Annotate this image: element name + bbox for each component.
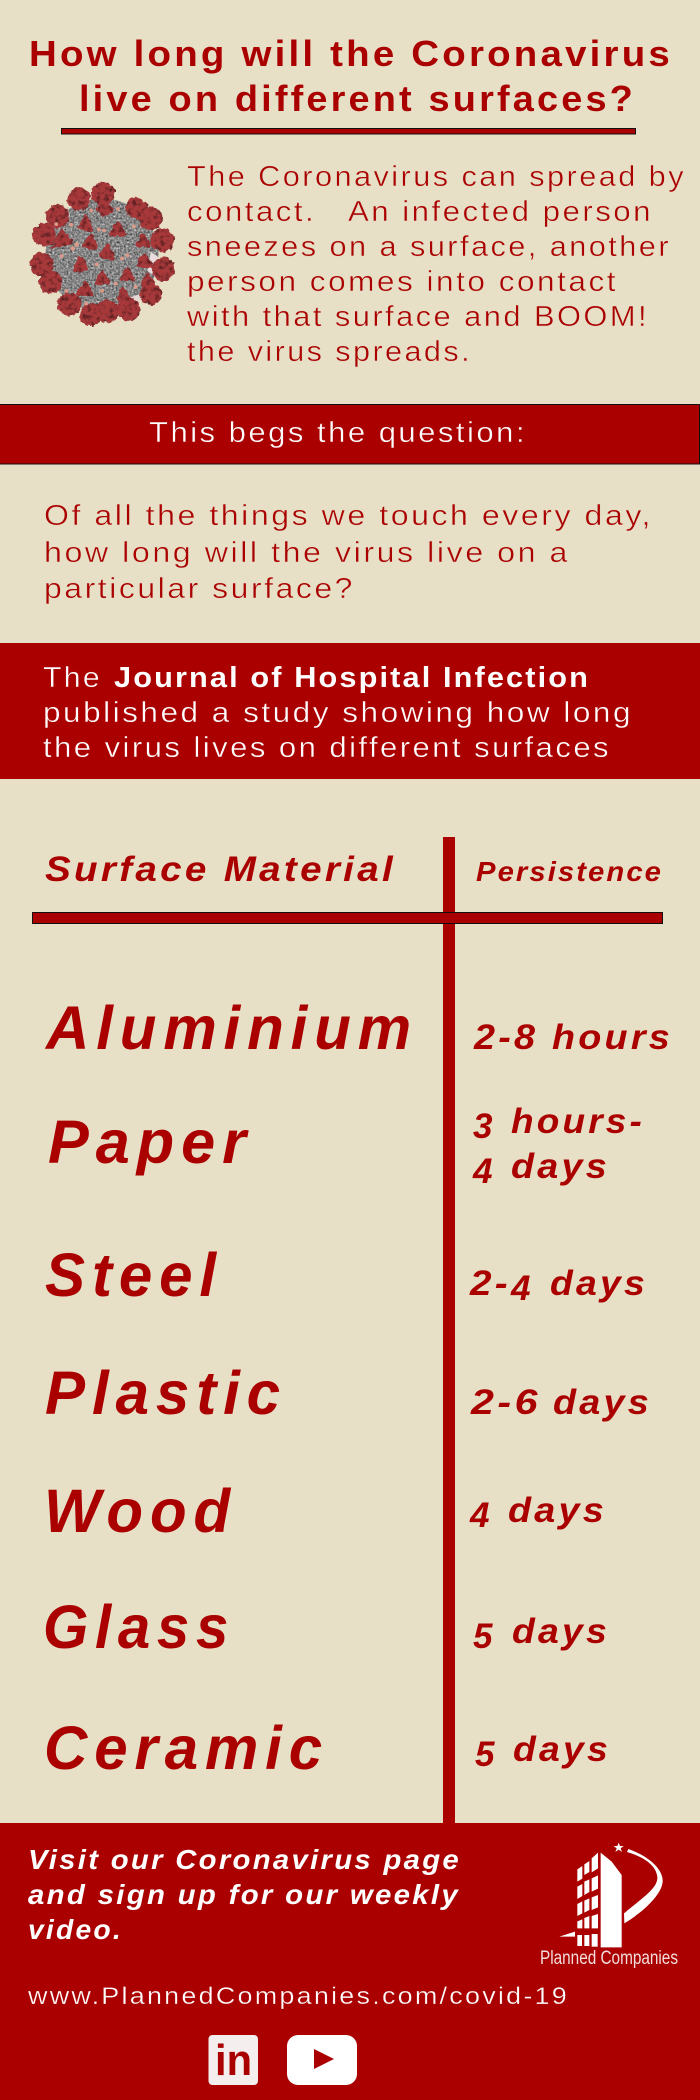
- banner: this begs the question: This begs the question:: [149, 417, 527, 449]
- question paragraph: [44, 500, 653, 605]
- icon: coronavirus particle: [32, 184, 173, 323]
- panel: journal study banner: Journal of Hospital Infection: [114, 662, 590, 694]
- website url: www.PlannedCompanies.com/covid-19: [27, 1983, 569, 2010]
- panel: journal study banner: [0, 643, 700, 779]
- row: wood: 4: [469, 1496, 492, 1535]
- call to action: Visit our Coronavirus page: [28, 1844, 461, 1875]
- row: wood: days: [508, 1491, 607, 1530]
- row: paper: 4: [472, 1152, 495, 1191]
- row: paper: 3: [473, 1107, 495, 1146]
- row: aluminium: [44, 994, 673, 1062]
- logo: planned companies: [540, 1843, 678, 1969]
- column heading: persistence: Persistence: [476, 856, 663, 887]
- row: plastic: days: [553, 1383, 652, 1422]
- intro paragraph: with that surface and BOOM!: [186, 301, 649, 333]
- title: live on different surfaces?: [79, 78, 636, 119]
- row: plastic: [45, 1359, 652, 1427]
- row: steel: 2-: [469, 1264, 511, 1303]
- title: How long will the Coronavirus: [29, 33, 673, 74]
- intro paragraph: The Coronavirus can spread by: [187, 161, 686, 193]
- icon: youtube: [287, 2035, 357, 2085]
- intro paragraph: contact. An infected person: [187, 196, 653, 228]
- row: steel: 4: [510, 1269, 533, 1308]
- intro paragraph: the virus spreads.: [187, 336, 472, 368]
- table column divider: [443, 837, 455, 1827]
- row: ceramic: Ceramic: [44, 1714, 329, 1782]
- panel: footer: [0, 1823, 700, 2100]
- call to action: [28, 1844, 461, 1945]
- row: paper: [48, 1102, 645, 1191]
- row: paper: Paper: [48, 1108, 253, 1176]
- icon: linkedin: in: [215, 2036, 252, 2085]
- intro paragraph: sneezes on a surface, another: [187, 231, 671, 263]
- panel: journal study banner: the virus lives on different surfaces: [43, 732, 611, 764]
- row: plastic: 2-6: [470, 1383, 541, 1422]
- row: steel: [45, 1241, 648, 1309]
- row: steel: days: [550, 1264, 648, 1303]
- banner: this begs the question: [0, 404, 700, 464]
- intro paragraph: [186, 161, 686, 368]
- row: glass: 5: [473, 1617, 495, 1656]
- question paragraph: Of all the things we touch every day,: [44, 500, 653, 532]
- question paragraph: how long will the virus live on a: [44, 537, 570, 569]
- call to action: video.: [28, 1914, 123, 1945]
- intro paragraph: person comes into contact: [187, 266, 618, 298]
- row: paper: hours-: [511, 1102, 645, 1141]
- question paragraph: particular surface?: [44, 573, 355, 605]
- row: glass: [43, 1593, 610, 1661]
- title: [29, 33, 673, 119]
- row: wood: Wood: [44, 1477, 237, 1545]
- row: plastic: Plastic: [45, 1359, 287, 1427]
- row: glass: days: [512, 1612, 610, 1651]
- row: ceramic: [44, 1714, 611, 1782]
- row: glass: Glass: [43, 1593, 235, 1661]
- row: wood: [44, 1477, 607, 1545]
- row: aluminium: Aluminium: [44, 994, 418, 1062]
- panel: journal study banner: published a study showing how long: [43, 697, 633, 729]
- title underline: [62, 128, 636, 134]
- row: steel: Steel: [45, 1241, 223, 1309]
- row: ceramic: 5: [475, 1735, 497, 1774]
- call to action: and sign up for our weekly: [28, 1879, 460, 1910]
- column heading: surface material: Surface Material: [45, 850, 396, 889]
- row: ceramic: days: [513, 1730, 611, 1769]
- row: paper: days: [511, 1147, 610, 1186]
- row: aluminium: 2-8 hours: [473, 1018, 673, 1057]
- table header rule: [32, 912, 662, 924]
- panel: journal study banner: The: [43, 662, 102, 694]
